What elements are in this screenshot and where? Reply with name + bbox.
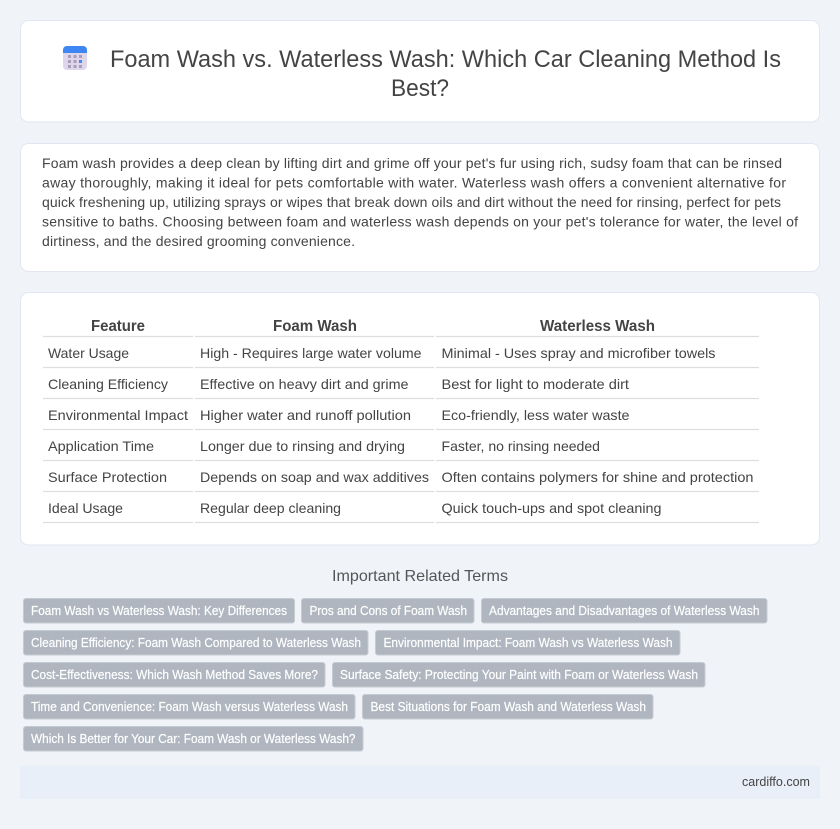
tag <box>482 598 767 623</box>
panel: comparison table <box>20 292 820 545</box>
tag: Cost-Effectiveness: Which Wash Method Saves More? <box>31 668 318 682</box>
table row: water usage: Water Usage <box>48 345 129 361</box>
table row: surface protection: Often contains polymers for shine and protection <box>442 469 754 485</box>
table row: application time <box>48 438 600 454</box>
table row: surface protection: Surface Protection <box>48 469 167 485</box>
tag: Best Situations for Foam Wash and Waterless Wash <box>370 700 646 714</box>
tag <box>24 662 325 687</box>
tag <box>332 662 705 687</box>
tag <box>24 598 294 623</box>
table row: water usage <box>48 345 716 361</box>
table row: cleaning efficiency: Cleaning Efficiency <box>48 376 168 392</box>
text block: description paragraph: sensitive to baths. Choosing between foam and waterless wash depends on your pet's tolerance for water, the level of <box>42 214 798 230</box>
table row: surface protection: Depends on soap and wax additives <box>200 469 429 485</box>
table header <box>91 318 655 335</box>
text block: description paragraph: away thoroughly, making it ideal for pets comfortable with water. Waterless wash offers a convenient alternative for <box>42 174 786 190</box>
tag: Environmental Impact: Foam Wash vs Waterless Wash <box>384 636 673 650</box>
tag: Time and Convenience: Foam Wash versus Waterless Wash <box>31 700 348 714</box>
tag: Pros and Cons of Foam Wash <box>310 604 467 618</box>
table row: ideal usage: Regular deep cleaning <box>200 500 341 516</box>
table row: cleaning efficiency: Best for light to moderate dirt <box>442 376 629 392</box>
table row: surface protection <box>48 469 754 485</box>
tag <box>302 598 474 623</box>
footer bar <box>20 766 820 799</box>
tag: Which Is Better for Your Car: Foam Wash or Waterless Wash? <box>31 732 356 746</box>
table row: ideal usage: Ideal Usage <box>48 500 123 516</box>
table row: application time: Longer due to rinsing and drying <box>200 438 405 454</box>
text block: description paragraph: Foam wash provides a deep clean by lifting dirt and grime off your pet's fur using rich, sudsy foam that can be rinsed <box>42 155 782 171</box>
related term tags <box>24 598 767 751</box>
tag: Cleaning Efficiency: Foam Wash Compared to Waterless Wash <box>31 636 361 650</box>
panel: description <box>20 144 820 272</box>
table header: Foam Wash <box>273 318 357 335</box>
heading: important related terms: Important Related Terms <box>332 568 508 585</box>
tag: Surface Safety: Protecting Your Paint with Foam or Waterless Wash <box>340 668 698 682</box>
table row: cleaning efficiency: Effective on heavy dirt and grime <box>200 376 409 392</box>
table header: Waterless Wash <box>540 318 655 335</box>
table row: application time: Faster, no rinsing needed <box>442 438 600 454</box>
table row: environmental impact: Environmental Impact <box>48 407 188 423</box>
table row: environmental impact <box>48 407 630 423</box>
tag <box>24 694 355 719</box>
table row: application time: Application Time <box>48 438 154 454</box>
icon: calendar <box>63 46 87 70</box>
table row: cleaning efficiency <box>48 376 629 392</box>
table row: ideal usage: Quick touch-ups and spot cleaning <box>442 500 662 516</box>
table header: Feature <box>91 318 145 335</box>
tag <box>24 630 368 655</box>
tag: Foam Wash vs Waterless Wash: Key Differences <box>31 604 287 618</box>
text block: description paragraph: dirtiness, and the desired grooming convenience. <box>42 233 355 249</box>
tag <box>24 726 363 751</box>
table row: ideal usage <box>48 500 662 516</box>
tag <box>362 694 653 719</box>
text block: description paragraph: quick freshening up, utilizing sprays or wipes that break down oils and dirt without the need for rinsing, perfect for pets <box>42 194 781 210</box>
table row: environmental impact: Higher water and runoff pollution <box>200 407 411 423</box>
tag: Advantages and Disadvantages of Waterless Wash <box>489 604 760 618</box>
title: Foam Wash vs. Waterless Wash: Which Car Cleaning Method Is <box>110 46 781 73</box>
tag <box>376 630 680 655</box>
table row: environmental impact: Eco-friendly, less water waste <box>442 407 630 423</box>
title <box>110 46 781 102</box>
text block: description paragraph <box>42 155 798 249</box>
table row: water usage: Minimal - Uses spray and microfiber towels <box>442 345 716 361</box>
table row: water usage: High - Requires large water volume <box>200 345 422 361</box>
header panel <box>20 20 820 122</box>
footer source text: cardiffo.com <box>742 774 810 789</box>
title: Best? <box>391 75 449 102</box>
